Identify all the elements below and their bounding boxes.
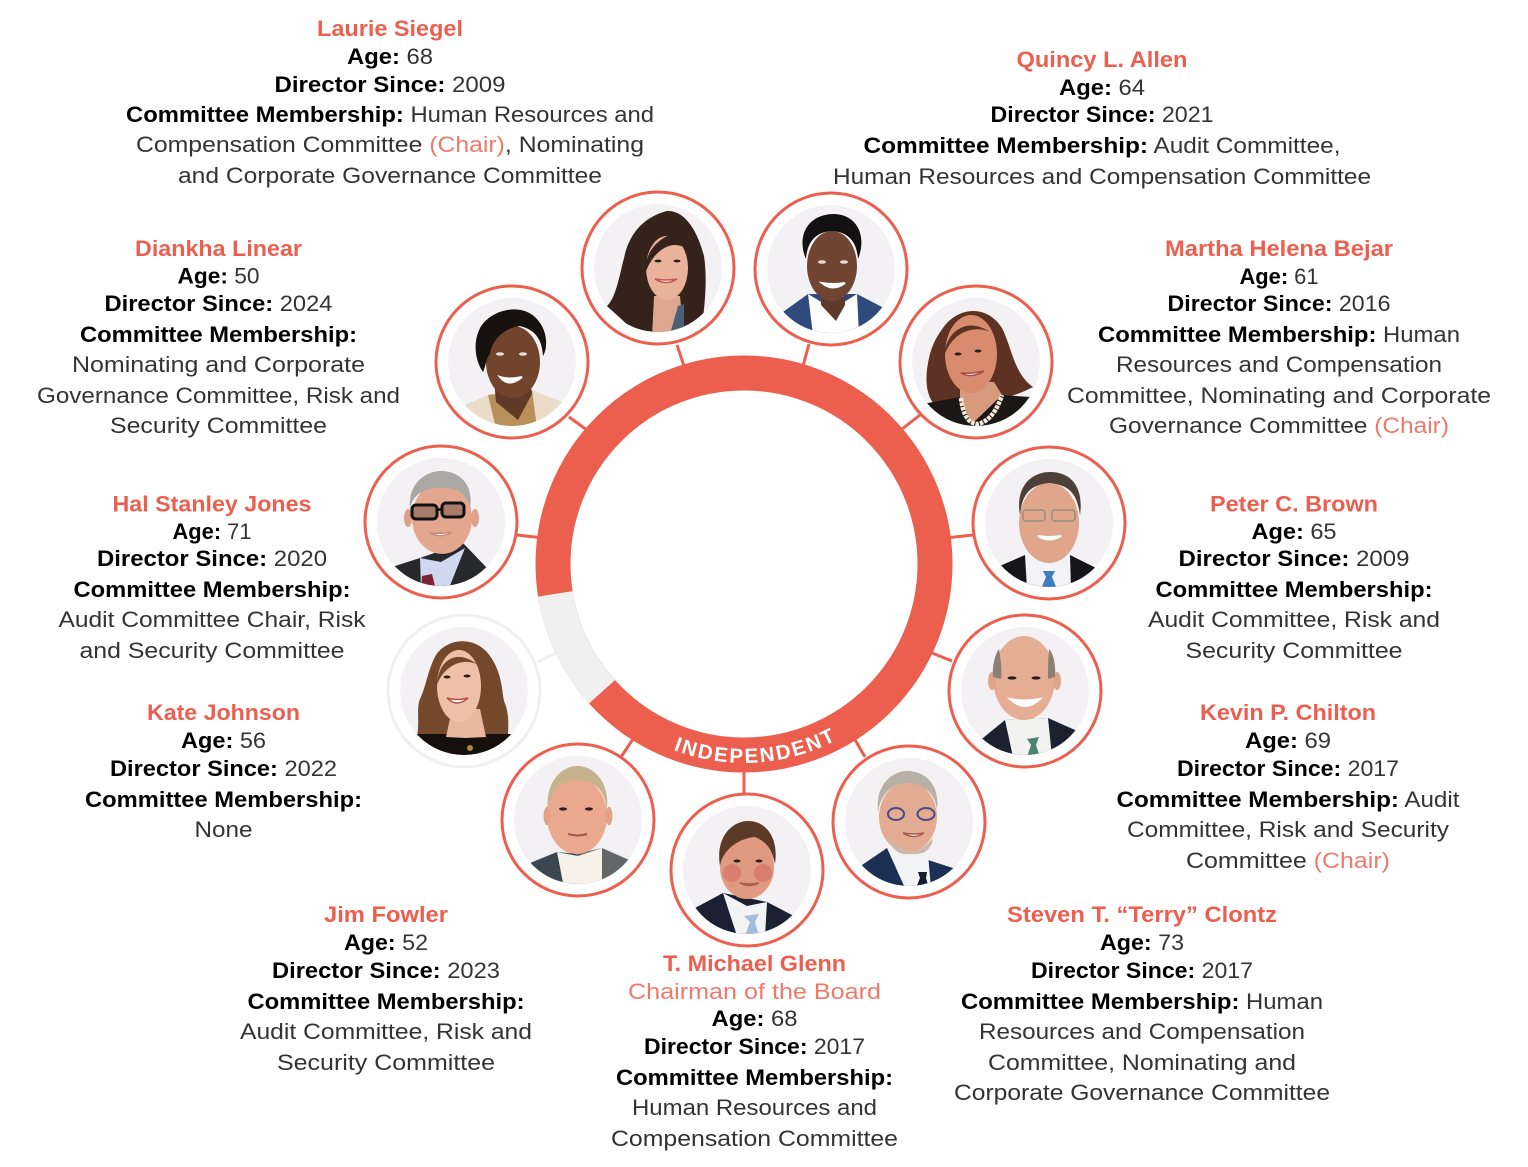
director text: Martha Helena Bejar: Governance Committee (Chair) [1109, 413, 1449, 438]
director text: Steven T. "Terry" Clontz: Resources and Compensation [979, 1019, 1305, 1044]
director text: Quincy L. Allen: Age: 64 [1059, 75, 1145, 100]
portrait: Steven T. "Terry" Clontz [833, 746, 985, 898]
director text: Hal Stanley Jones: Director Since: 2020 [97, 546, 327, 571]
director text: Laurie Siegel: and Corporate Governance Committee [178, 163, 602, 188]
director text: Kate Johnson: Kate Johnson [147, 700, 300, 725]
director text: Diankha Linear: Governance Committee, Risk and [37, 383, 400, 408]
director text: Hal Stanley Jones: Committee Membership: [74, 577, 350, 602]
director text: Martha Helena Bejar: Committee Membership: Human [1098, 322, 1460, 347]
grey non-independent arc [555, 594, 602, 692]
central ring chart: independent share [536, 356, 952, 772]
director text: Quincy L. Allen: Human Resources and Compensation Committee [833, 164, 1371, 189]
director text: Kevin P. Chilton: Age: 69 [1245, 728, 1331, 753]
director text: Steven T. "Terry" Clontz [954, 902, 1330, 1105]
director text: Kevin P. Chilton: Director Since: 2017 [1177, 756, 1399, 781]
director text: T. Michael Glenn: Age: 68 [712, 1006, 798, 1031]
director text: Kevin P. Chilton: Committee Membership: Audit [1116, 787, 1460, 812]
director text: T. Michael Glenn: Human Resources and [632, 1095, 877, 1120]
director text: Peter C. Brown: Committee Membership: [1156, 577, 1432, 602]
director text: T. Michael Glenn: T. Michael Glenn [663, 951, 846, 976]
director text: Jim Fowler [240, 902, 532, 1075]
director text: Steven T. "Terry" Clontz: Age: 73 [1100, 930, 1184, 955]
director text: Kevin P. Chilton [1116, 700, 1460, 873]
director text: Kate Johnson: Director Since: 2022 [110, 756, 337, 781]
director text: Kate Johnson: None [194, 817, 252, 842]
connector lines [517, 344, 973, 795]
director text: Laurie Siegel: Compensation Committee (Chair) , Nominating [136, 132, 644, 157]
director text: Peter C. Brown: Peter C. Brown [1210, 492, 1378, 516]
ring label: INDEPENDENT [674, 728, 832, 763]
director text: Jim Fowler: Committee Membership: [248, 989, 524, 1014]
director text: Martha Helena Bejar: Committee, Nominating and Corporate [1067, 383, 1491, 408]
director text: Diankha Linear [37, 236, 400, 438]
director text: Kate Johnson: Committee Membership: [85, 787, 362, 812]
portrait: Quincy L. Allen [755, 193, 907, 345]
director text: Laurie Siegel: Director Since: 2009 [274, 72, 506, 97]
director text: Jim Fowler: Director Since: 2023 [272, 958, 500, 983]
director text: Peter C. Brown: Audit Committee, Risk and [1148, 607, 1440, 632]
director text: Laurie Siegel: Laurie Siegel [317, 16, 463, 41]
director text: T. Michael Glenn: Compensation Committee [611, 1126, 898, 1151]
director text: Peter C. Brown: Director Since: 2009 [1178, 546, 1410, 571]
director text: Diankha Linear: Director Since: 2024 [104, 291, 332, 316]
director text: Steven T. "Terry" Clontz: Director Since: 2017 [1031, 958, 1253, 983]
director text: Martha Helena Bejar: Martha Helena Bejar [1165, 236, 1393, 261]
portrait: Kate Johnson [388, 615, 540, 767]
director text: Hal Stanley Jones: Hal Stanley Jones [112, 492, 312, 516]
portrait: Diankha Linear [436, 286, 588, 438]
director text: T. Michael Glenn [611, 951, 898, 1151]
director text: Peter C. Brown: Age: 65 [1252, 519, 1336, 544]
director text: Kate Johnson [85, 700, 362, 842]
director text: Kevin P. Chilton: Committee (Chair) [1186, 848, 1390, 873]
director text: Steven T. "Terry" Clontz: Committee Membership: Human [961, 989, 1323, 1014]
director text: Diankha Linear: Nominating and Corporate [72, 352, 365, 377]
director text: Diankha Linear: Committee Membership: [80, 322, 357, 347]
director text: Kevin P. Chilton: Kevin P. Chilton [1200, 700, 1376, 725]
director text: Peter C. Brown: Security Committee [1186, 638, 1402, 663]
director text: Quincy L. Allen: Director Since: 2021 [990, 102, 1214, 127]
director text: Martha Helena Bejar [1067, 236, 1491, 438]
director text: Laurie Siegel: Age: 68 [347, 44, 433, 69]
director text: Laurie Siegel: Committee Membership: Human Resources and [126, 102, 654, 127]
director text: Kate Johnson: Age: 56 [181, 728, 266, 753]
portrait: Jim Fowler [502, 744, 654, 896]
director text: Diankha Linear: Diankha Linear [135, 236, 302, 261]
director text: T. Michael Glenn: Chairman of the Board [628, 979, 881, 1004]
director text: Kevin P. Chilton: Committee, Risk and Security [1127, 817, 1450, 842]
director text: Jim Fowler: Age: 52 [344, 930, 428, 955]
portrait: Laurie Siegel [582, 192, 734, 344]
director text: Diankha Linear: Age: 50 [178, 264, 260, 288]
director text: Hal Stanley Jones [58, 492, 366, 663]
director text: Jim Fowler: Jim Fowler [324, 902, 448, 927]
director text: Hal Stanley Jones: and Security Committee [80, 638, 344, 663]
director text: Diankha Linear: Security Committee [110, 413, 327, 438]
portrait: Martha Helena Bejar [900, 286, 1052, 438]
director text: Quincy L. Allen: Quincy L. Allen [1016, 47, 1188, 72]
portrait: Hal Stanley Jones [365, 446, 517, 598]
director text: Peter C. Brown [1148, 492, 1440, 663]
director text: Jim Fowler: Security Committee [277, 1050, 495, 1075]
director text: Quincy L. Allen [833, 47, 1371, 189]
director text: Hal Stanley Jones: Audit Committee Chair, Risk [58, 607, 366, 632]
director text: Quincy L. Allen: Committee Membership: Audit Committee, [864, 133, 1340, 158]
director text: Martha Helena Bejar: Age: 61 [1240, 264, 1318, 289]
director text: T. Michael Glenn: Committee Membership: [616, 1065, 893, 1090]
director text: Martha Helena Bejar: Director Since: 2016 [1168, 291, 1391, 316]
director text: Martha Helena Bejar: Resources and Compensation [1116, 352, 1442, 377]
director text: Laurie Siegel [126, 16, 654, 188]
director text: Steven T. "Terry" Clontz: Steven T. “Terry” Clontz [1007, 902, 1277, 927]
director text: Hal Stanley Jones: Age: 71 [172, 519, 251, 544]
director text: T. Michael Glenn: Director Since: 2017 [644, 1034, 865, 1059]
director text: Jim Fowler: Audit Committee, Risk and [240, 1019, 532, 1044]
director text: Steven T. "Terry" Clontz: Corporate Governance Committee [954, 1080, 1330, 1105]
portrait: Kevin P. Chilton [949, 615, 1101, 767]
portrait: T. Michael Glenn [671, 794, 823, 946]
portrait: Peter C. Brown [973, 447, 1125, 599]
director text: Steven T. "Terry" Clontz: Committee, Nominating and [988, 1050, 1296, 1075]
